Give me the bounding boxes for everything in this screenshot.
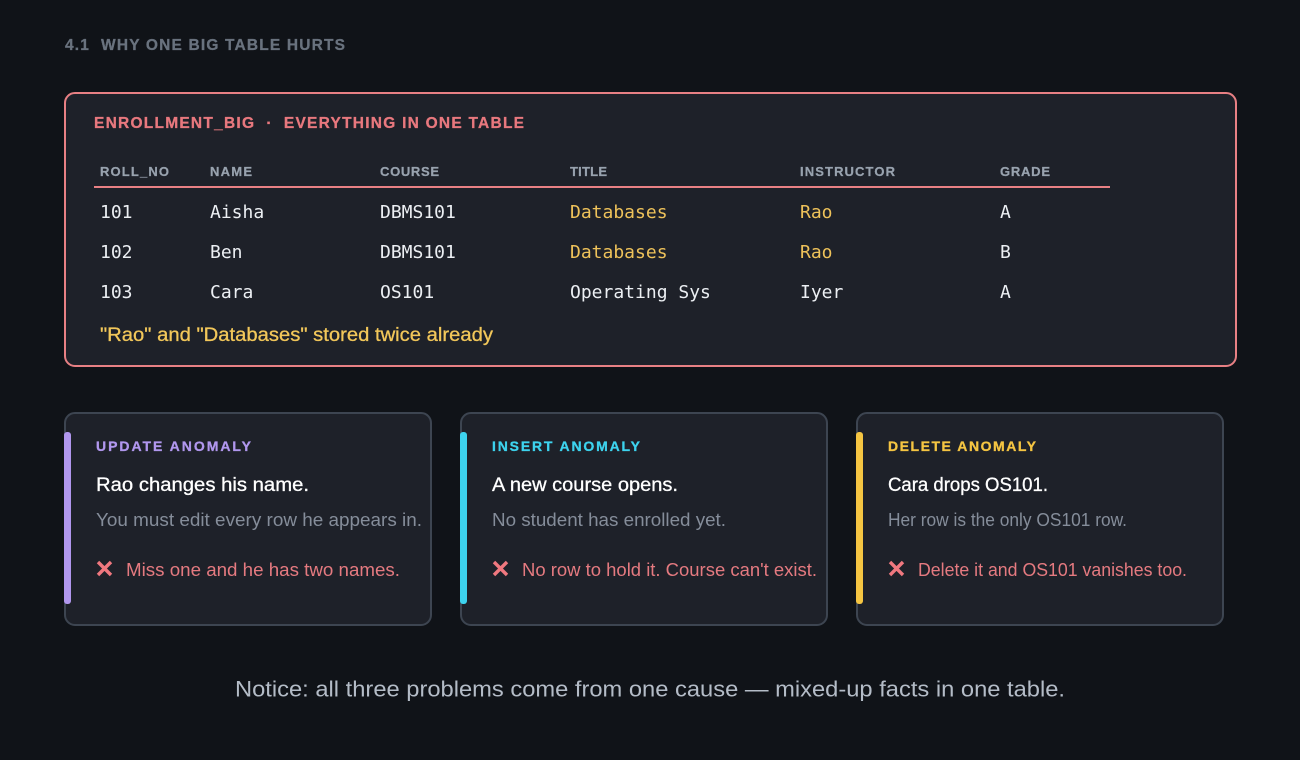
table row 102: B bbox=[1000, 242, 1011, 263]
table row 102 bbox=[100, 242, 1011, 263]
panel heading: ENROLLMENT_BIG · EVERYTHING IN ONE TABLE bbox=[94, 115, 524, 132]
table row 103: Operating Sys bbox=[570, 282, 711, 303]
panel: enrollment big table bbox=[65, 93, 1236, 366]
title: 4.1 WHY ONE BIG TABLE HURTS bbox=[65, 37, 345, 54]
table header: TITLE bbox=[570, 164, 607, 179]
table row 103: Iyer bbox=[800, 282, 844, 303]
table row 101: A bbox=[1000, 202, 1011, 223]
table row 101: Rao bbox=[800, 202, 833, 223]
table row 101: DBMS101 bbox=[380, 202, 456, 223]
card title: A new course opens. bbox=[492, 474, 678, 496]
icon: cross bbox=[890, 562, 903, 575]
panel: insert anomaly bbox=[460, 413, 827, 625]
card body: No student has enrolled yet. bbox=[492, 510, 726, 530]
card title: Cara drops OS101. bbox=[888, 474, 1048, 496]
accent bar bbox=[856, 432, 863, 604]
card label: INSERT ANOMALY bbox=[492, 438, 641, 454]
footer takeaway: Notice: all three problems come from one cause — mixed-up facts in one table. bbox=[235, 676, 1065, 702]
consequence: No row to hold it. Course can't exist. bbox=[522, 560, 817, 580]
table row 102: 102 bbox=[100, 242, 133, 263]
table row 103: Cara bbox=[210, 282, 253, 303]
card title: Rao changes his name. bbox=[96, 474, 309, 496]
table row 101: Databases bbox=[570, 202, 668, 223]
panel: delete anomaly bbox=[856, 413, 1223, 625]
icon: cross bbox=[98, 562, 111, 575]
table row 102: Rao bbox=[800, 242, 833, 263]
accent bar bbox=[460, 432, 467, 604]
panel: update anomaly bbox=[64, 413, 431, 625]
table row 101: 101 bbox=[100, 202, 133, 223]
table row 103 bbox=[100, 282, 1011, 303]
card label: DELETE ANOMALY bbox=[888, 438, 1037, 454]
table header: GRADE bbox=[1000, 164, 1050, 179]
table row 103: OS101 bbox=[380, 282, 434, 303]
table row 101 bbox=[100, 202, 1011, 223]
card body: You must edit every row he appears in. bbox=[96, 510, 422, 530]
table header: NAME bbox=[210, 164, 252, 179]
card label: UPDATE ANOMALY bbox=[96, 438, 252, 454]
card body: Her row is the only OS101 row. bbox=[888, 510, 1127, 530]
table row 103: A bbox=[1000, 282, 1011, 303]
table row 103: 103 bbox=[100, 282, 133, 303]
table note: "Rao" and "Databases" stored twice already bbox=[100, 324, 493, 346]
table header: INSTRUCTOR bbox=[800, 164, 896, 179]
table header: COURSE bbox=[380, 164, 439, 179]
consequence: Delete it and OS101 vanishes too. bbox=[918, 560, 1187, 580]
table header bbox=[100, 164, 1050, 179]
icon: cross bbox=[494, 562, 507, 575]
table header: ROLL_NO bbox=[100, 164, 169, 179]
table row 101: Aisha bbox=[210, 202, 264, 223]
table row 102: Databases bbox=[570, 242, 668, 263]
consequence: Miss one and he has two names. bbox=[126, 560, 400, 580]
accent bar bbox=[64, 432, 71, 604]
table row 102: Ben bbox=[210, 242, 243, 263]
table row 102: DBMS101 bbox=[380, 242, 456, 263]
